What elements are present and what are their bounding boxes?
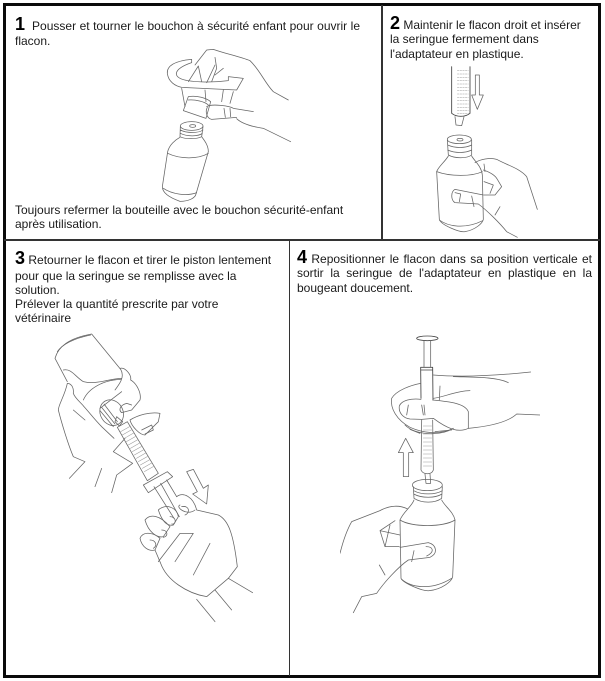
step 3 instruction text: pour que la seringue se remplisse avec la — [15, 269, 236, 283]
step 3 instruction text: vétérinaire — [15, 311, 71, 325]
step 1 note text — [15, 203, 344, 231]
step 1 note text: Toujours refermer la bouteille avec le bouchon sécurité-enfant — [15, 203, 343, 217]
step 1 illustration: opening the cap — [162, 49, 292, 202]
step 3 instruction text: solution. — [15, 283, 60, 297]
step 2 instruction text — [390, 13, 581, 61]
step 4 instruction text — [297, 247, 592, 295]
step 1 instruction text — [15, 14, 360, 48]
step 2 instruction text: la seringue fermement dans — [390, 32, 539, 46]
step 4 illustration: removing syringe — [340, 336, 540, 614]
step 4 instruction text: bougeant doucement. — [297, 281, 413, 295]
step 2 instruction text: 2 Maintenir le flacon droit et insérer — [390, 13, 581, 33]
step 2 illustration: inserting syringe — [436, 66, 538, 238]
step 4 instruction text: sortir la seringue de l'adaptateur en plastique en la — [297, 266, 592, 280]
step 3 instruction text: Prélever la quantité prescrite par votre — [15, 297, 218, 311]
step 4 instruction text: 4 Repositionner le flacon dans sa position verticale et — [297, 247, 592, 267]
step 3 instruction text — [15, 248, 271, 325]
step 1 note text: après utilisation. — [15, 217, 102, 231]
step 3 illustration: filling syringe — [54, 334, 253, 622]
step 1 instruction text: flacon. — [15, 34, 50, 48]
step 1 instruction text: 1 Pousser et tourner le bouchon à sécurité enfant pour ouvrir le — [15, 14, 360, 34]
step 3 instruction text: 3 Retourner le flacon et tirer le piston lentement — [15, 248, 271, 268]
step 2 instruction text: l'adaptateur en plastique. — [390, 47, 524, 61]
